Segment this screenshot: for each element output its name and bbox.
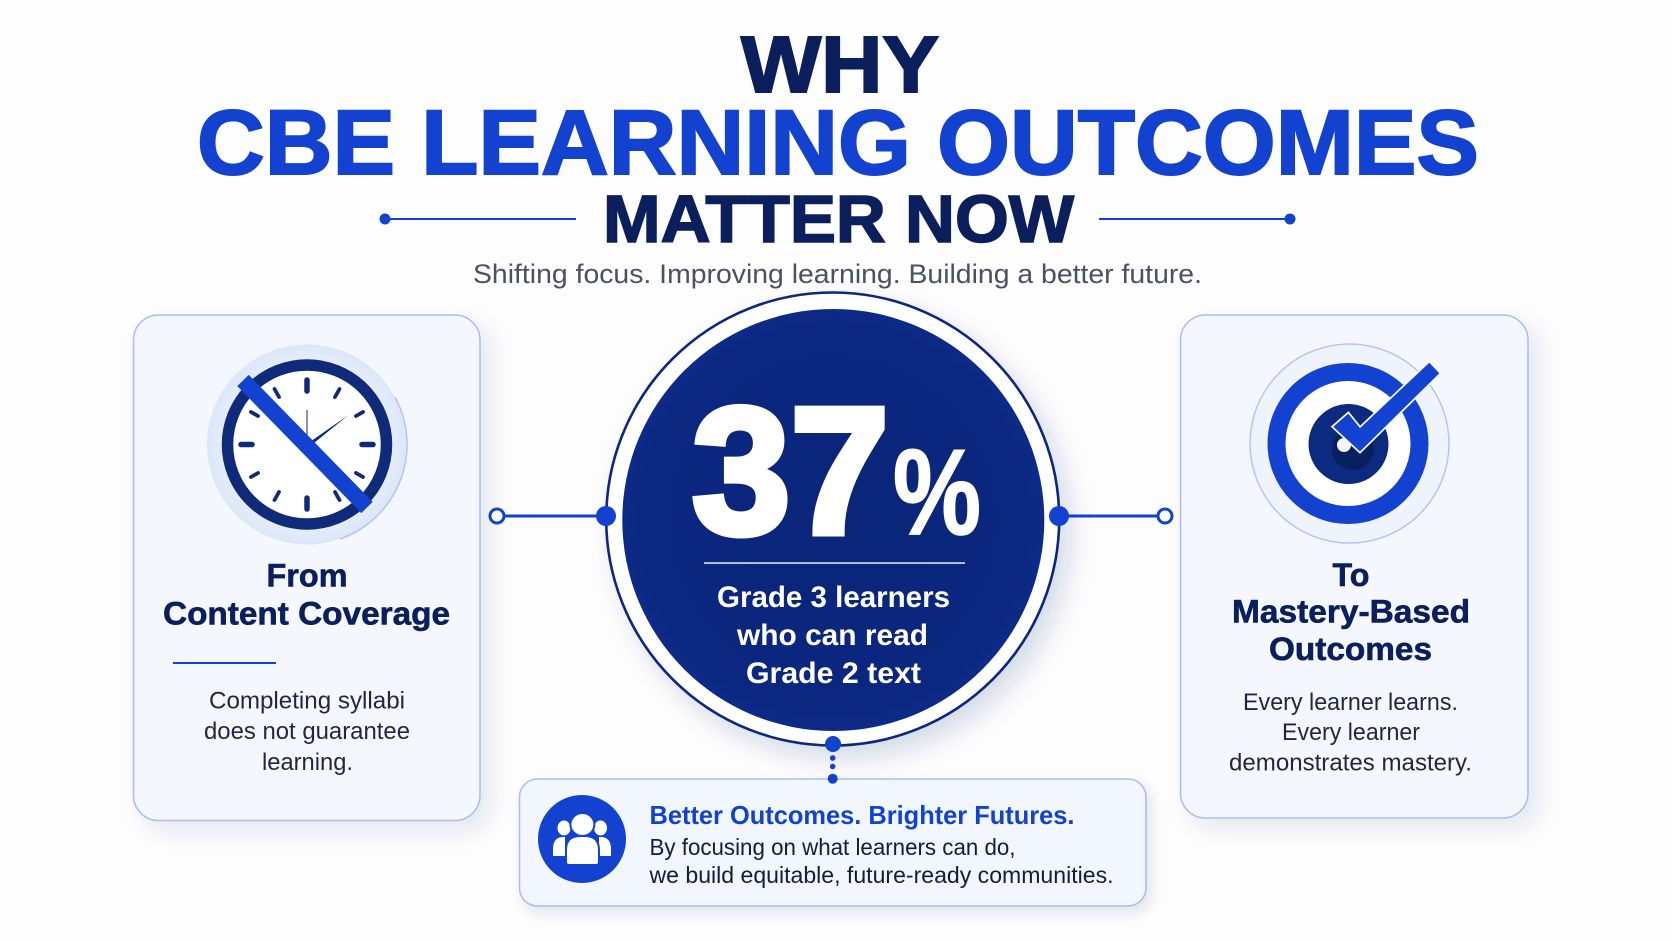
heading: to mastery-based outcomes: To <box>1332 557 1370 593</box>
heading: from content coverage: From <box>266 558 348 594</box>
icon: target with check mark <box>1250 344 1449 543</box>
arrow: right connector <box>1059 509 1172 523</box>
panel: to mastery-based outcomes <box>1180 315 1528 818</box>
text: right body: Every learner learns. <box>1243 689 1458 716</box>
title line: WHY: WHY <box>741 20 939 109</box>
callout text: By focusing on what learners can do, <box>650 834 1016 860</box>
stat caption: Grade 2 text <box>746 657 921 690</box>
callout text <box>648 800 1114 888</box>
text: right body: Every learner <box>1282 719 1420 746</box>
heading: to mastery-based outcomes <box>1232 557 1470 667</box>
text: left body: Completing syllabi <box>209 688 405 714</box>
stat: 37 percent: 37 <box>692 371 889 572</box>
heading: from content coverage <box>163 558 450 632</box>
stat caption: who can read <box>736 619 928 652</box>
stat divider <box>704 562 965 564</box>
text: right body <box>1229 689 1472 776</box>
subtitle: Shifting focus. Improving learning. Building a better future. <box>473 259 1202 289</box>
heading: to mastery-based outcomes: Outcomes <box>1269 631 1432 667</box>
panel: from content coverage <box>134 315 480 820</box>
short divider <box>173 662 276 664</box>
stat: 37 percent <box>692 371 981 572</box>
text: left body: does not guarantee <box>204 718 410 745</box>
callout text: Better Outcomes. Brighter Futures. <box>650 800 1074 830</box>
title rule: left <box>380 214 576 224</box>
heading: from content coverage: Content Coverage <box>163 596 450 632</box>
text: left body: learning. <box>262 749 353 776</box>
title <box>197 20 1479 257</box>
dotted connector to callout <box>825 736 841 784</box>
stat caption <box>717 581 950 690</box>
callout text: we build equitable, future-ready communities. <box>648 862 1114 888</box>
heading: to mastery-based outcomes: Mastery-Based <box>1232 594 1470 630</box>
stat: 37 percent: % <box>893 424 981 560</box>
title line: CBE Learning Outcomes: CBE LEARNING OUTCOMES <box>197 92 1479 194</box>
icon: group of people <box>538 795 626 883</box>
title line: Matter Now: MATTER NOW <box>603 182 1075 257</box>
central stat circle <box>606 292 1059 746</box>
node: right <box>1049 506 1069 526</box>
title rule: right <box>1099 214 1296 224</box>
icon: crossed-out clock <box>207 344 407 544</box>
callout: better outcomes <box>520 779 1146 906</box>
text: left body <box>204 688 410 776</box>
arrow: left connector <box>490 509 606 523</box>
text: right body: demonstrates mastery. <box>1229 750 1472 776</box>
stat caption: Grade 3 learners <box>717 581 950 614</box>
node: left <box>596 506 616 526</box>
